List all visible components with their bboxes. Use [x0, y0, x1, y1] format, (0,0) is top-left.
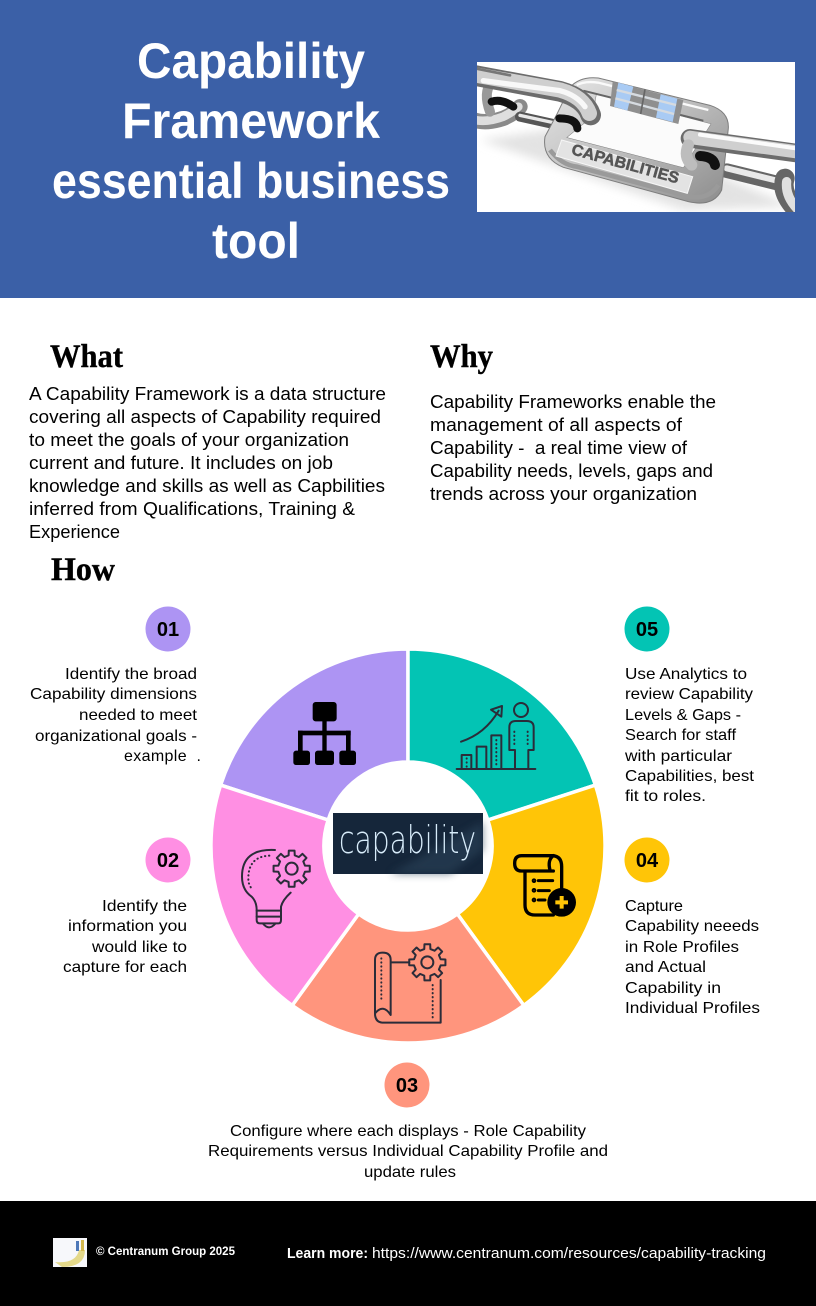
- image: chain link labelled capabilities: CAPABILITIES: [570, 141, 681, 187]
- text block: why: trends across your organization: [430, 484, 697, 504]
- step 04 text: [625, 898, 760, 1017]
- step 02 badge: [146, 838, 190, 882]
- step 04 badge: 04: [636, 850, 659, 872]
- text block: what: covering all aspects of Capability required: [29, 407, 381, 427]
- step 05 badge: [624, 606, 670, 652]
- plate: [556, 140, 693, 193]
- icon: light bulb and gear: [242, 850, 310, 927]
- step 01 text: Identify the broad: [65, 666, 197, 683]
- segment 04 yellow: [457, 785, 605, 1005]
- step 04 text: Capability neeeds: [625, 918, 759, 935]
- icon: blueprint and gear: [375, 944, 445, 1023]
- step 03 text: Requirements versus Individual Capability Profile and: [208, 1143, 608, 1160]
- donut chart: [211, 649, 605, 1043]
- segment 05 teal: [408, 649, 595, 820]
- heading: What: What: [50, 339, 123, 375]
- title: [52, 33, 450, 269]
- step 02 text: [63, 898, 187, 976]
- main link body: [545, 78, 728, 203]
- step 03 badge: 03: [396, 1075, 418, 1097]
- step 02 text: information you: [68, 918, 187, 935]
- text block: why: [430, 392, 716, 504]
- text block: what: to meet the goals of your organization: [29, 430, 349, 450]
- step 01 text: needed to meet: [79, 707, 198, 724]
- step 03 text: Configure where each displays - Role Capability: [230, 1123, 586, 1140]
- step 04 badge: [624, 838, 670, 882]
- step 02 badge: 02: [157, 850, 179, 872]
- segment 01 purple: [221, 649, 408, 820]
- header band: [0, 0, 816, 298]
- footer link: https://www.centranum.com/resources/capability-tracking: [372, 1246, 766, 1262]
- step 03 badge: [384, 1062, 430, 1108]
- icon: scroll with plus: [515, 856, 576, 917]
- title: tool: [212, 213, 300, 269]
- text block: why: Capability - a real time view of: [430, 438, 688, 458]
- heading: Why: Why: [430, 339, 493, 375]
- step 01 badge: 01: [157, 619, 179, 641]
- step 05 text: Levels & Gaps -: [625, 707, 741, 724]
- image: capability sign: [333, 813, 483, 874]
- step 05 text: Search for staff: [625, 727, 737, 744]
- image: capability sign: capability: [339, 818, 476, 862]
- footer band: [0, 1201, 816, 1306]
- text block: what: Experience: [29, 522, 120, 542]
- step 05 badge: 05: [636, 619, 658, 641]
- step 05 text: fit to roles.: [625, 788, 706, 805]
- step 05 text: review Capability: [625, 686, 753, 703]
- title: essential business: [52, 153, 450, 209]
- text block: why: Capability Frameworks enable the: [430, 392, 716, 412]
- step 02 text: capture for each: [63, 959, 187, 976]
- step 03 text: update rules: [364, 1164, 456, 1181]
- step 02 text: Identify the: [102, 898, 187, 915]
- step 04 text: and Actual: [625, 959, 706, 976]
- text block: what: A Capability Framework is a data structure: [29, 384, 386, 404]
- step 01 badge: [146, 606, 190, 652]
- clasp: [610, 82, 683, 124]
- image: chain link labelled capabilities: [467, 62, 798, 212]
- step 04 text: in Role Profiles: [625, 939, 739, 956]
- step 04 text: Capture: [625, 898, 683, 915]
- segment 02 pink: [211, 785, 359, 1005]
- text block: why: Capability needs, levels, gaps and: [430, 461, 713, 481]
- step 01 text: [30, 666, 201, 765]
- segment 03 salmon: [292, 914, 524, 1043]
- step 01 text: organizational goals -: [35, 728, 197, 745]
- step 05 text: Use Analytics to: [625, 666, 747, 683]
- footer logo: [53, 1238, 87, 1267]
- text block: what: current and future. It includes on job: [29, 453, 333, 473]
- step 05 text: with particular: [624, 748, 733, 765]
- icon: growth chart and person: [457, 703, 535, 769]
- step 02 text: would like to: [91, 939, 187, 956]
- step 04 text: Capability in: [625, 980, 721, 997]
- step 03 text: [208, 1123, 608, 1181]
- heading: How: How: [51, 552, 115, 588]
- step 05 text: Capabilities, best: [625, 768, 755, 785]
- footer copyright: © Centranum Group 2025: [96, 1246, 236, 1258]
- step 05 text: [624, 666, 755, 805]
- text block: what: knowledge and skills as well as Capbilities: [29, 476, 385, 496]
- icon: org chart: [293, 702, 356, 765]
- title: Framework: [122, 93, 380, 149]
- text block: what: [29, 384, 386, 542]
- footer link: Learn more:: [287, 1246, 368, 1262]
- title: Capability: [137, 33, 365, 89]
- step 04 text: Individual Profiles: [625, 1000, 760, 1017]
- step 01 text: example .: [124, 748, 201, 765]
- step 01 text: Capability dimensions: [30, 686, 197, 703]
- text block: what: inferred from Qualifications, Training &: [29, 499, 355, 519]
- text block: why: management of all aspects of: [430, 415, 683, 435]
